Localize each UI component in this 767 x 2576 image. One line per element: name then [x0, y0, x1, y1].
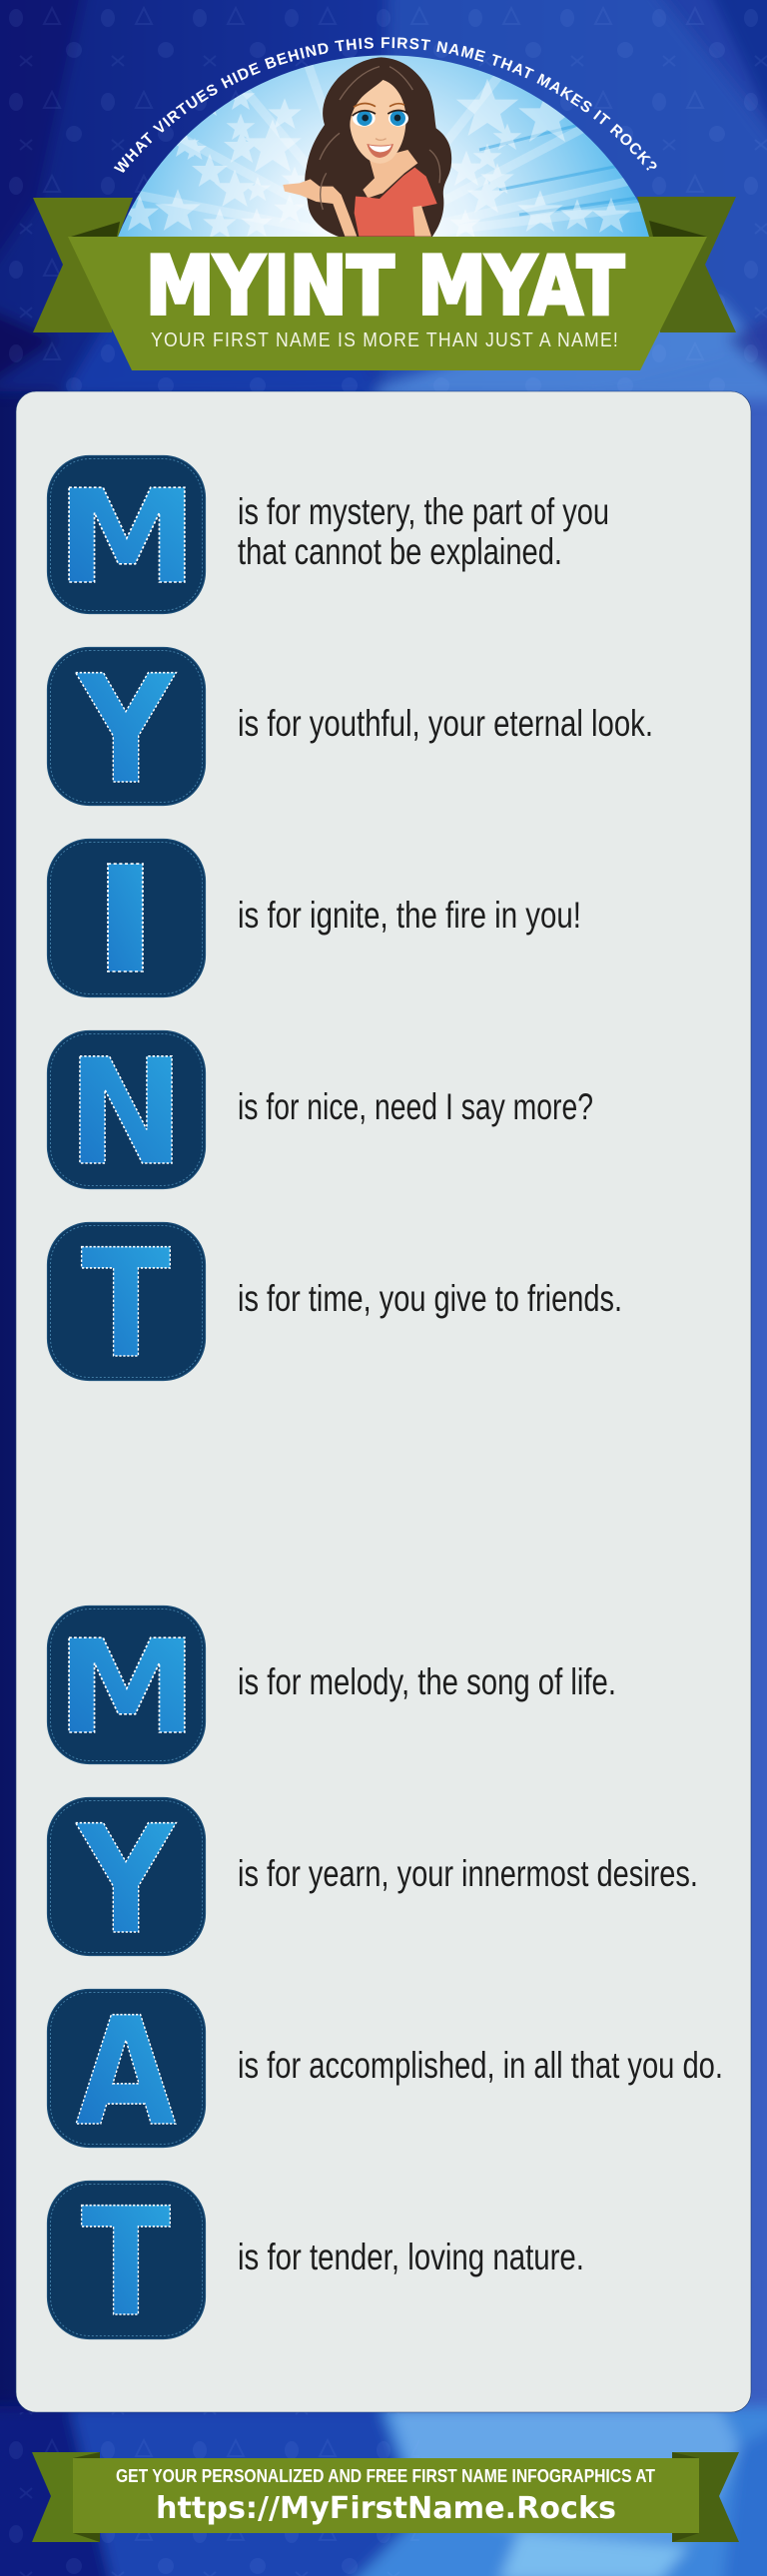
row: T tender — [48, 2177, 584, 2350]
subtitle: YOUR FIRST NAME IS MORE THAN JUST A NAME! — [151, 329, 618, 351]
row: T time: is for time, you give to friends. — [238, 1278, 622, 1319]
title: MYINT MYAT — [146, 240, 624, 332]
arched tagline: WHAT VIRTUES HIDE BEHIND THIS FIRST NAME THAT MAKES IT ROCK? — [114, 37, 657, 173]
hair highlights — [320, 67, 440, 210]
footer ribbon — [32, 2452, 739, 2542]
row: Y youthful: Y — [75, 644, 177, 818]
main ribbon — [68, 237, 707, 370]
row: Y youthful: is for youthful, your eternal look. — [238, 703, 653, 744]
row: M mystery: that cannot be explained. — [238, 531, 562, 572]
row: Y youthful — [48, 644, 653, 818]
ribbon tails — [33, 197, 736, 332]
row: N nice: is for nice, need I say more? — [238, 1086, 593, 1127]
row: A accomplished: A — [76, 1986, 176, 2160]
row: T time: T — [81, 1218, 171, 1392]
hair — [305, 57, 451, 237]
row: M melody — [48, 1606, 616, 1763]
row: I ignite: I — [91, 835, 160, 1006]
row: M melody: is for melody, the song of life. — [238, 1661, 616, 1702]
footer url: https://MyFirstName.Rocks — [156, 2491, 616, 2526]
face — [350, 80, 405, 164]
raised hand and arm — [283, 179, 357, 237]
row: T tender: T — [81, 2177, 171, 2350]
content panel — [16, 391, 751, 2412]
row: M melody: M — [56, 1611, 198, 1763]
row: N nice — [48, 1027, 593, 1198]
top — [355, 168, 437, 237]
row: A accomplished — [48, 1986, 723, 2160]
row: I ignite: is for ignite, the fire in you! — [238, 895, 581, 936]
neck and chest — [363, 150, 417, 198]
row: T tender: is for tender, loving nature. — [238, 2237, 584, 2277]
row: M mystery: is for mystery, the part of you — [238, 491, 609, 532]
row: I ignite — [48, 835, 581, 1006]
character illustration — [283, 57, 451, 237]
row: N nice: N — [67, 1027, 185, 1198]
row: M mystery — [48, 455, 609, 613]
row: M mystery: M — [56, 461, 198, 613]
smile — [367, 144, 393, 158]
eyes — [353, 103, 408, 127]
row: Y yearn: Y — [75, 1794, 177, 1968]
header dome with stars — [118, 55, 649, 237]
row: T time — [48, 1218, 622, 1392]
footer call to action: GET YOUR PERSONALIZED AND FREE FIRST NAME INFOGRAPHICS AT — [116, 2466, 655, 2486]
arm on hip — [412, 206, 431, 237]
row: Y yearn — [48, 1794, 698, 1968]
